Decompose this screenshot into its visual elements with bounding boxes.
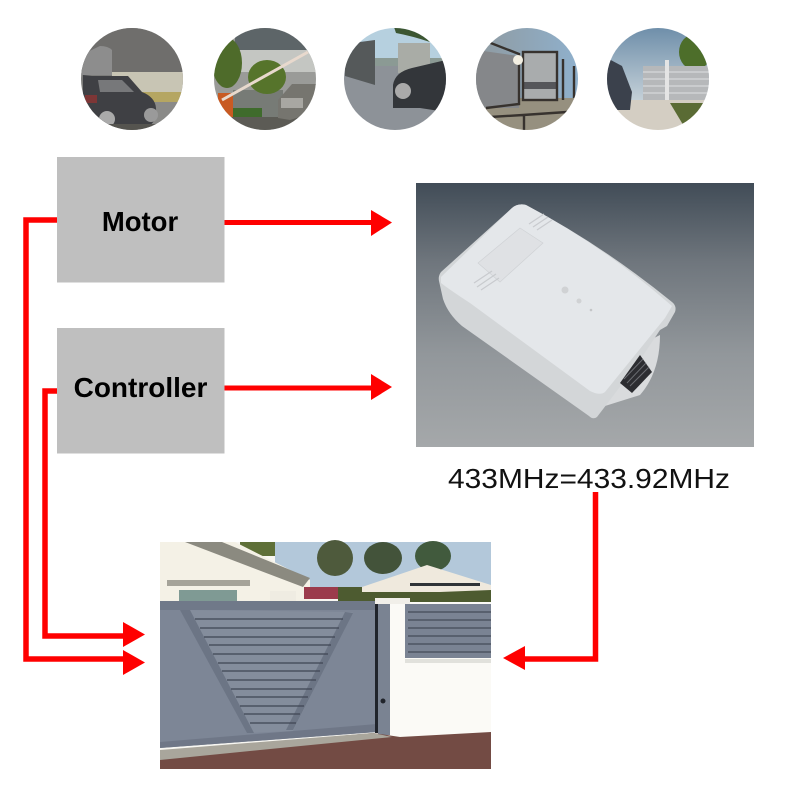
label recess (478, 228, 543, 282)
indicator dots (562, 286, 568, 294)
arrow: Controller to receiver (224, 374, 392, 400)
antenna disc (605, 335, 660, 406)
gate panel (160, 601, 377, 748)
grooves (474, 214, 552, 290)
arrow: Motor to receiver (224, 210, 392, 236)
box: Controller (57, 328, 224, 454)
photo: swing metal gate (476, 28, 578, 130)
antenna coil (620, 355, 652, 393)
photo: white fence with car (607, 28, 711, 130)
wall and post (378, 602, 390, 735)
box: Motor (57, 157, 224, 282)
arrow: Controller to gate (45, 391, 145, 647)
device top face (441, 204, 672, 394)
arrow: receiver to gate (503, 492, 596, 670)
photo: sliding gate (160, 540, 491, 769)
photo: barrier with SUV (212, 28, 316, 130)
arrow: Motor to gate (26, 220, 145, 675)
photo row: gate applications (81, 24, 711, 132)
ground (160, 732, 491, 769)
box: Controller: Controller (74, 372, 207, 403)
device side (439, 204, 676, 418)
photo: receiver device (416, 183, 754, 447)
photo: sliding gate with dark car (344, 24, 446, 130)
box: Motor: Motor (102, 206, 178, 237)
louvred triangle (180, 610, 353, 733)
photo: garage door with car (81, 28, 183, 132)
frequency label: 433MHz=433.92MHz (448, 463, 730, 494)
